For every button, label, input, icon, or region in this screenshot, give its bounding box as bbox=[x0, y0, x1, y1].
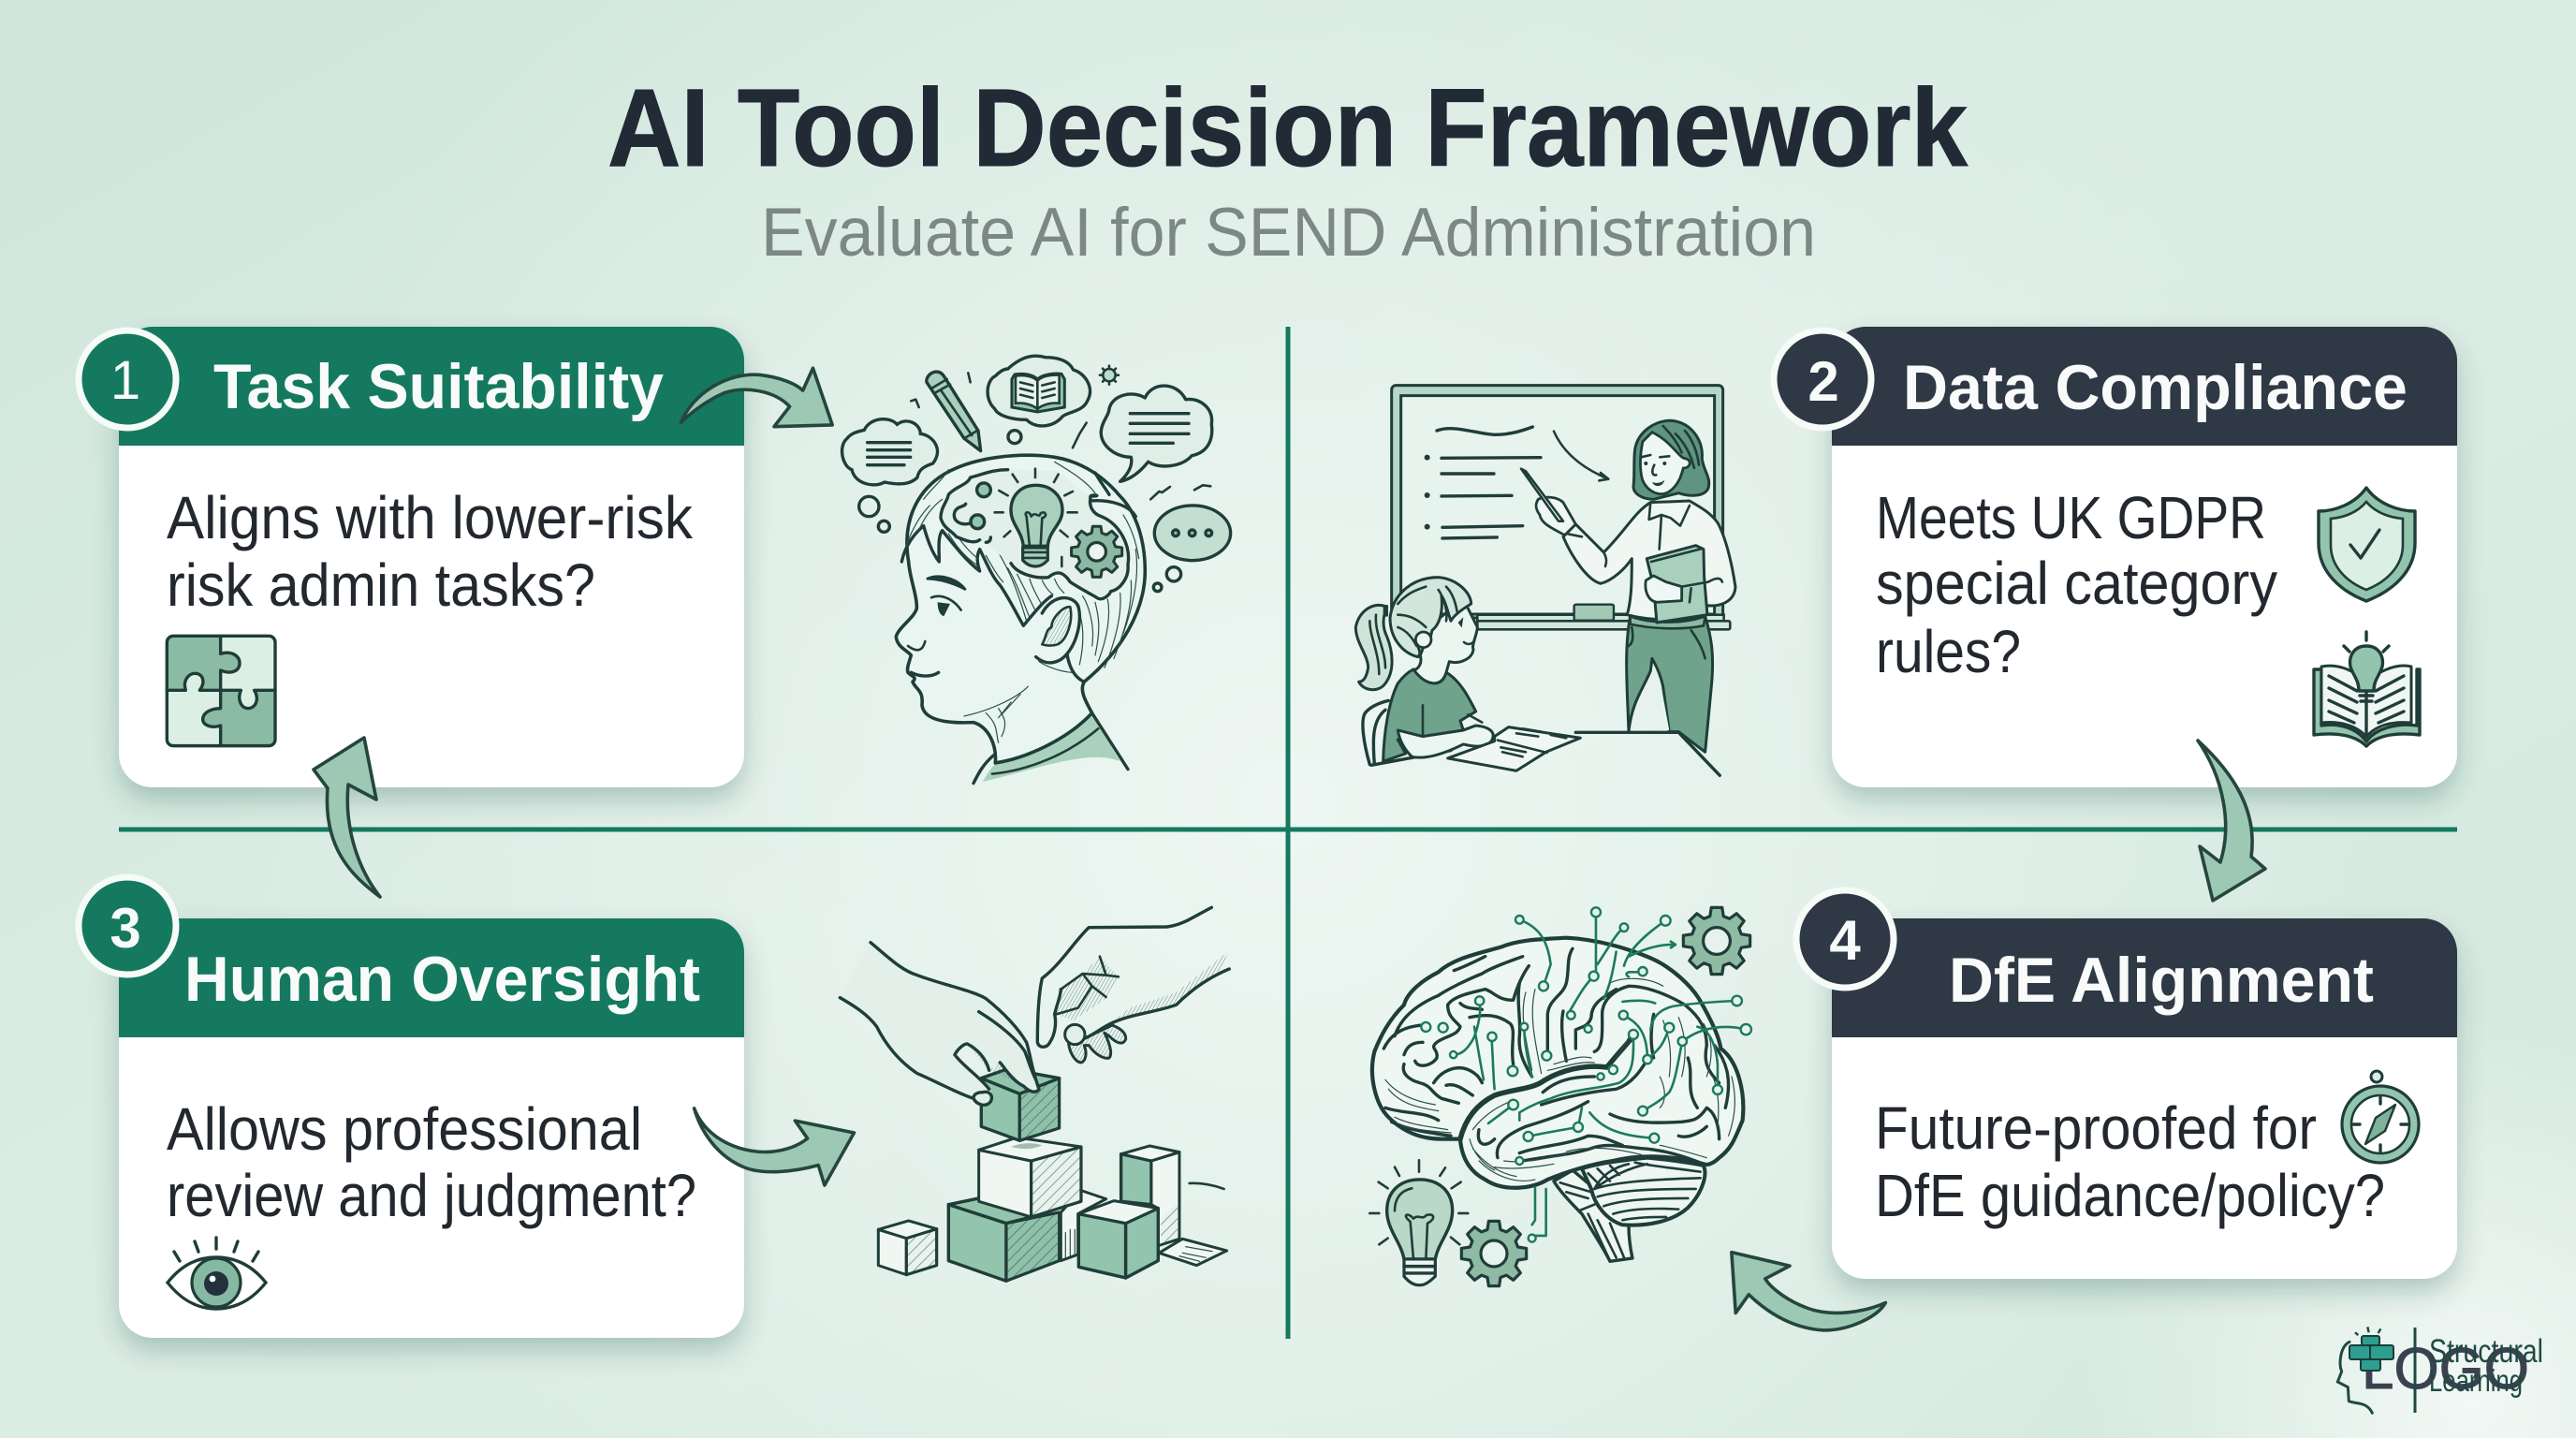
question: rules? bbox=[1876, 618, 2021, 685]
heading: Task Suitability bbox=[213, 351, 664, 422]
logo: LOGO bbox=[2362, 1337, 2529, 1401]
badge 1: 1 bbox=[110, 350, 140, 411]
lightbulb bbox=[1369, 1160, 1468, 1285]
question bbox=[167, 484, 694, 619]
circuit traces bbox=[1421, 907, 1751, 1242]
logo: Structural bbox=[2429, 1333, 2543, 1370]
badge 4: 4 bbox=[1829, 909, 1861, 972]
title: AI Tool Decision Framework bbox=[607, 66, 1968, 190]
question bbox=[1876, 484, 2277, 685]
subtitle: Evaluate AI for SEND Administration bbox=[761, 195, 1816, 271]
teacher bbox=[1521, 420, 1735, 752]
heading: Human Oversight bbox=[184, 944, 700, 1015]
question bbox=[1875, 1094, 2385, 1229]
icon: brain gear bottom bbox=[1461, 1221, 1527, 1286]
illustration: child head with ideas bbox=[842, 356, 1231, 784]
badge 3 bbox=[79, 877, 176, 975]
student bbox=[1355, 578, 1720, 775]
question: review and judgment? bbox=[167, 1162, 696, 1229]
lightbulb bbox=[995, 469, 1077, 566]
cloud left bbox=[842, 419, 937, 485]
panel: task suitability bbox=[79, 327, 744, 787]
heading: DfE Alignment bbox=[1949, 945, 2374, 1016]
icon: brain gear top bbox=[1683, 907, 1750, 975]
speech dots bubble bbox=[1154, 506, 1231, 561]
panel: data compliance bbox=[1774, 327, 2457, 787]
whiteboard bbox=[1392, 386, 1730, 629]
question: special category bbox=[1876, 550, 2277, 617]
icon: puzzle bbox=[167, 636, 275, 746]
question: Allows professional bbox=[167, 1095, 642, 1163]
arrow: DfE to brain bbox=[1732, 1253, 1885, 1330]
left hand bbox=[840, 943, 1039, 1107]
icon: compass bbox=[2342, 1071, 2419, 1163]
question bbox=[167, 1095, 696, 1229]
gear in head bbox=[1072, 526, 1122, 577]
blocks bbox=[878, 1069, 1227, 1281]
question: Aligns with lower-risk bbox=[167, 484, 694, 551]
icon: eye bbox=[168, 1238, 266, 1309]
panel: human oversight bbox=[79, 877, 744, 1338]
illustration: brain with circuits bbox=[1369, 907, 1751, 1285]
hair and fringe bbox=[901, 462, 1139, 742]
speech bubble right bbox=[1101, 386, 1212, 481]
arrow: human oversight up to task bbox=[314, 738, 380, 897]
pencil bbox=[927, 372, 981, 451]
panel: DfE alignment bbox=[1796, 890, 2457, 1279]
arrow: task to illustration bbox=[681, 368, 832, 427]
badge 4 bbox=[1796, 890, 1894, 988]
badge 2: 2 bbox=[1808, 350, 1839, 413]
brain area bbox=[941, 470, 1129, 599]
heading: Data Compliance bbox=[1903, 352, 2408, 423]
illustration: hands stacking blocks bbox=[840, 907, 1229, 1281]
logo: Learning bbox=[2429, 1363, 2523, 1398]
question: DfE guidance/policy? bbox=[1875, 1162, 2385, 1229]
question: Meets UK GDPR bbox=[1876, 484, 2266, 551]
badge 2 bbox=[1774, 330, 1871, 428]
icon: book with lightbulb bbox=[2314, 632, 2420, 746]
shirt bbox=[983, 714, 1120, 782]
logo bbox=[2337, 1327, 2543, 1413]
badge 3: 3 bbox=[110, 897, 141, 960]
tiny sun gear bbox=[1100, 366, 1119, 385]
illustration: teacher and student bbox=[1355, 386, 1735, 775]
question: risk admin tasks? bbox=[167, 551, 595, 619]
cerebellum and stem bbox=[1554, 1158, 1705, 1261]
icon: shield bbox=[2319, 488, 2415, 601]
folds bbox=[1383, 948, 1729, 1164]
arrow: data compliance to DfE bbox=[2198, 741, 2265, 901]
question: Future-proofed for bbox=[1875, 1094, 2317, 1162]
main fissure bbox=[1460, 1036, 1633, 1139]
badge 1 bbox=[79, 330, 176, 428]
arrow: oversight to blocks bbox=[695, 1108, 854, 1185]
head outline bbox=[896, 455, 1145, 763]
cloud top with book bbox=[988, 356, 1090, 426]
face details bbox=[908, 577, 966, 676]
brain outline bbox=[1372, 938, 1743, 1188]
right hand bbox=[1037, 907, 1229, 1063]
